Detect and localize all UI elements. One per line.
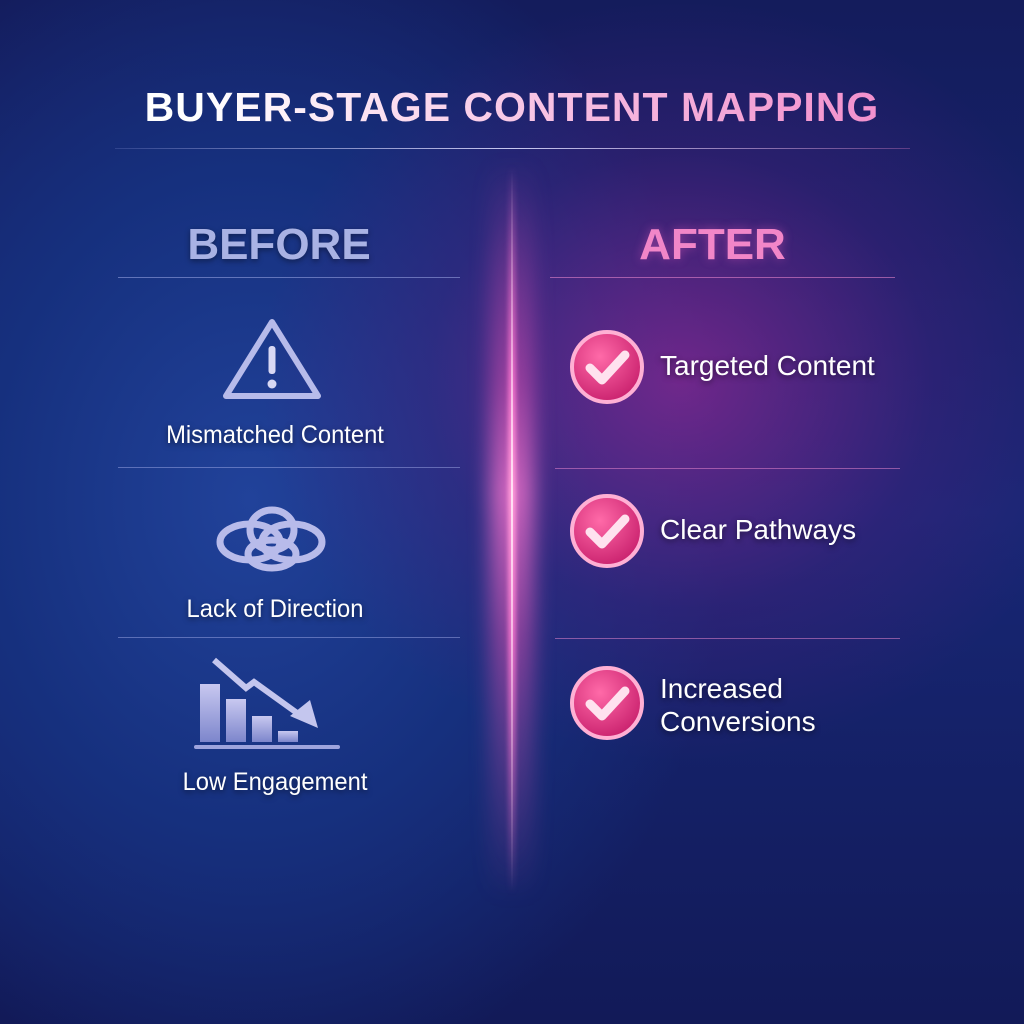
text: Clear Pathways: Clear Pathways (660, 514, 856, 545)
icon: check (570, 666, 644, 740)
panel: before item 1 (165, 319, 385, 449)
panel: before item 2 (186, 506, 365, 623)
text: Increased Conversions: Increased (660, 673, 783, 704)
icon: knot (216, 506, 326, 572)
panel: before item 3 (182, 658, 368, 799)
icon: declining chart (194, 658, 340, 749)
panel: after item 3 (570, 666, 816, 740)
title: BUYER-STAGE CONTENT MAPPING (145, 84, 879, 130)
center glowing divider (490, 160, 534, 900)
text: Lack of Direction: Lack of Direction (187, 595, 363, 623)
icon: warning (223, 319, 321, 399)
icon: check (570, 330, 644, 404)
text: Increased Conversions (659, 673, 816, 737)
icon: check (570, 494, 644, 568)
text: Mismatched Content: Mismatched Content (166, 421, 384, 449)
text: Targeted Content: Targeted Content (660, 350, 875, 381)
heading: BEFORE: BEFORE (187, 220, 371, 269)
panel: after item 2 (570, 494, 857, 568)
panel: after item 1 (570, 330, 876, 404)
text: Increased Conversions: Conversions (660, 706, 816, 737)
text: Low Engagement: Low Engagement (183, 768, 367, 796)
heading: AFTER: AFTER (639, 220, 786, 269)
